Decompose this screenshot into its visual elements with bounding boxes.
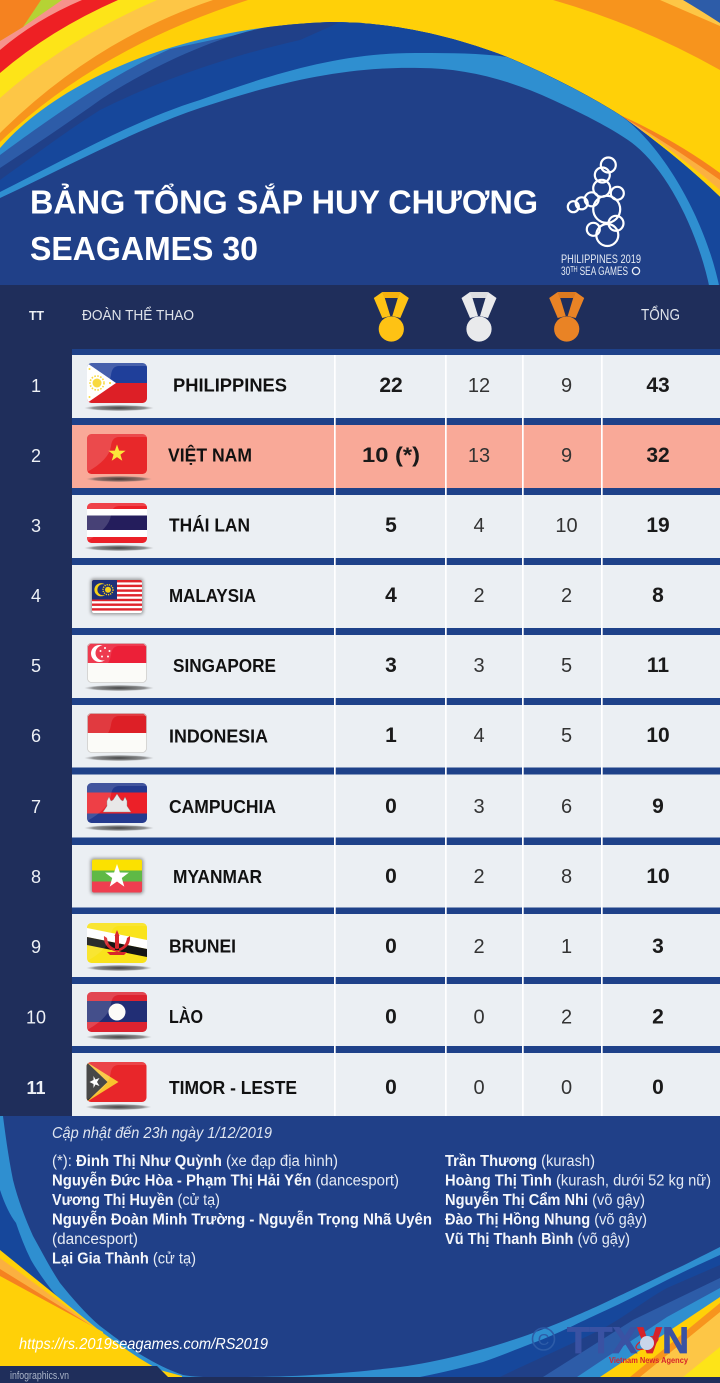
row 6: Indonesia: 6	[31, 726, 41, 746]
title	[30, 184, 538, 267]
athlete list: right column: Nguyễn Thị Cẩm Nhi (võ gậy)	[445, 1192, 645, 1209]
row 8: Myanmar: 8	[561, 866, 572, 888]
watermark: TTXVN logo: C	[538, 1332, 549, 1349]
flag: Myanmar	[90, 858, 144, 894]
header label: TT: TT	[29, 308, 44, 323]
athlete list: left column: Vương Thị Huyền (cử tạ)	[52, 1192, 220, 1209]
row 5: Singapore	[31, 635, 720, 698]
row 3: Thailand	[31, 495, 720, 558]
row 1: Philippines: 12	[468, 375, 490, 397]
footer credit: infographics.vn	[10, 1370, 69, 1382]
logo: Philippines 2019 30th SEA Games	[561, 158, 641, 278]
row 1: Philippines	[31, 355, 720, 418]
row 7: Cambodia: 9	[652, 795, 664, 818]
flag: Indonesia	[84, 713, 154, 761]
header label: team: ĐOÀN THỂ THAO	[82, 306, 194, 324]
row 3: Thailand: 19	[646, 514, 670, 537]
row 9: Brunei: 2	[473, 936, 485, 958]
athlete list: right column: Vũ Thị Thanh Bình (võ gậy)	[445, 1231, 630, 1248]
row 5: Singapore: 3	[385, 654, 397, 677]
row 7: Cambodia: 7	[31, 797, 41, 817]
athlete list: left column	[52, 1153, 432, 1268]
row 9: Brunei: 0	[385, 935, 397, 958]
row 2: Viet Nam (highlighted): 10 (*)	[362, 444, 420, 467]
athlete list: left column: Nguyễn Đức Hòa - Phạm Thị Hải Yến (dancesport)	[52, 1172, 399, 1190]
row 9: Brunei: 1	[561, 936, 572, 958]
header label: total: TỔNG	[641, 306, 680, 324]
source URL: https://rs.2019seagames.com/RS2019	[19, 1336, 268, 1353]
title: BẢNG TỔNG SẮP HUY CHƯƠNG	[30, 184, 538, 220]
row 10: Laos: 10	[26, 1008, 46, 1028]
row 2: Viet Nam (highlighted): 2	[31, 446, 41, 466]
row 10: Laos: LÀO	[169, 1006, 203, 1027]
row 2: Viet Nam (highlighted): 32	[646, 444, 670, 467]
row 7: Cambodia: CAMPUCHIA	[169, 797, 276, 817]
row 9: Brunei: 3	[652, 935, 664, 958]
row 8: Myanmar: 0	[385, 865, 397, 888]
row 10: Laos: 2	[652, 1006, 664, 1028]
row 8: Myanmar	[31, 845, 720, 908]
background: bottom colour arcs	[0, 1116, 720, 1383]
athlete list: right column	[445, 1153, 711, 1248]
row 7: Cambodia: 6	[561, 796, 572, 818]
row 6: Indonesia: 4	[473, 725, 485, 747]
row 1: Philippines: 9	[561, 375, 572, 397]
athlete list: right column: Hoàng Thị Tình (kurash, dưới 52 kg nữ)	[445, 1172, 711, 1190]
row 2: Viet Nam (highlighted): VIỆT NAM	[168, 444, 252, 466]
table header bar	[0, 285, 720, 349]
row 11: Timor-Leste	[26, 1053, 720, 1116]
update note: Cập nhật đến 23h ngày 1/12/2019	[52, 1125, 272, 1142]
row 5: Singapore: 3	[473, 655, 485, 677]
column separators	[334, 355, 603, 1116]
flag: Timor-Leste	[86, 1062, 152, 1110]
row 2: Viet Nam (highlighted): 9	[561, 445, 572, 467]
row 6: Indonesia	[31, 705, 720, 768]
row 6: Indonesia: 10	[646, 724, 670, 747]
logo: Philippines 2019 30th SEA Games: PHILIPPINES 2019	[561, 252, 641, 266]
athlete list: left column: (*): Đinh Thị Như Quỳnh (xe đạp địa hình)	[52, 1153, 338, 1170]
row 4: Malaysia: 4	[385, 584, 397, 607]
row 8: Myanmar: 2	[473, 866, 485, 888]
row 10: Laos: 0	[473, 1006, 485, 1028]
row 4: Malaysia: 2	[473, 585, 485, 607]
row 11: Timor-Leste: 11	[26, 1078, 46, 1098]
row 1: Philippines: 22	[379, 374, 403, 397]
row 6: Indonesia: INDONESIA	[169, 726, 268, 746]
row 10: Laos	[26, 984, 720, 1046]
row 4: Malaysia: MALAYSIA	[169, 586, 256, 606]
row 5: Singapore: 5	[31, 656, 41, 676]
flag: Viet Nam	[86, 434, 152, 482]
row 3: Thailand: 3	[31, 516, 41, 536]
flag: Philippines	[84, 363, 154, 411]
row 1: Philippines: 1	[31, 376, 41, 396]
row 10: Laos: 0	[385, 1006, 397, 1028]
row 11: Timor-Leste: 0	[385, 1076, 397, 1099]
flag: Brunei	[86, 923, 152, 971]
flag: Cambodia	[84, 783, 154, 831]
watermark: TTXVN logo: TTXVN	[567, 1320, 689, 1361]
athlete list: left column: (dancesport)	[52, 1231, 138, 1248]
row 4: Malaysia: 2	[561, 585, 572, 607]
row 4: Malaysia: 4	[31, 586, 41, 606]
flag: Thailand	[84, 503, 154, 551]
row 5: Singapore: 5	[561, 655, 572, 677]
watermark: TTXVN logo: Vietnam News Agency	[609, 1356, 689, 1365]
row 2: Viet Nam (highlighted)	[31, 425, 720, 488]
row 7: Cambodia	[31, 774, 720, 838]
row 4: Malaysia: 8	[652, 584, 664, 607]
row 2: Viet Nam (highlighted): 13	[468, 445, 490, 467]
athlete list: right column: Đào Thị Hồng Nhung (võ gậy)	[445, 1212, 647, 1228]
row 3: Thailand: 4	[473, 515, 485, 537]
row 11: Timor-Leste: 0	[473, 1077, 485, 1099]
row 11: Timor-Leste: TIMOR - LESTE	[169, 1078, 297, 1098]
flag: Malaysia	[90, 578, 144, 614]
athlete list: left column: Nguyễn Đoàn Minh Trường - Nguyễn Trọng Nhã Uyên	[52, 1212, 432, 1228]
row 3: Thailand: 10	[555, 515, 578, 537]
row 1: Philippines: 43	[646, 374, 670, 397]
row 9: Brunei: BRUNEI	[169, 936, 236, 956]
row 9: Brunei: 9	[31, 937, 41, 957]
row 8: Myanmar: 10	[646, 865, 670, 888]
athlete list: left column: Lại Gia Thành (cử tạ)	[52, 1250, 196, 1268]
flag: Singapore	[84, 643, 154, 691]
row 8: Myanmar: MYANMAR	[173, 867, 262, 887]
row 5: Singapore: SINGAPORE	[173, 656, 276, 676]
background: top colour arcs	[0, 0, 720, 300]
athlete list: right column: Trần Thương (kurash)	[445, 1153, 595, 1170]
icon: silver medal	[462, 292, 496, 342]
row 4: Malaysia	[31, 565, 720, 628]
table background: rank column and row bands	[0, 349, 720, 1116]
icon: gold medal	[374, 292, 409, 342]
row 5: Singapore: 11	[647, 654, 669, 677]
row 3: Thailand: THÁI LAN	[169, 514, 250, 536]
row 1: Philippines: PHILIPPINES	[173, 376, 287, 396]
row 7: Cambodia: 3	[473, 796, 485, 818]
row 6: Indonesia: 5	[561, 725, 572, 747]
row 7: Cambodia: 0	[385, 795, 397, 818]
row 11: Timor-Leste: 0	[561, 1077, 572, 1099]
logo: Philippines 2019 30th SEA Games: 30ᵀᴴ SEA GAMES	[561, 264, 628, 278]
row 10: Laos: 2	[561, 1006, 572, 1028]
row 11: Timor-Leste: 0	[652, 1076, 664, 1099]
icon: bronze medal	[549, 292, 584, 342]
row 3: Thailand: 5	[385, 514, 397, 537]
row 8: Myanmar: 8	[31, 867, 41, 887]
row 6: Indonesia: 1	[385, 724, 397, 747]
title: SEAGAMES 30	[30, 230, 258, 267]
row 9: Brunei	[31, 914, 720, 977]
flag: Laos	[86, 992, 152, 1040]
